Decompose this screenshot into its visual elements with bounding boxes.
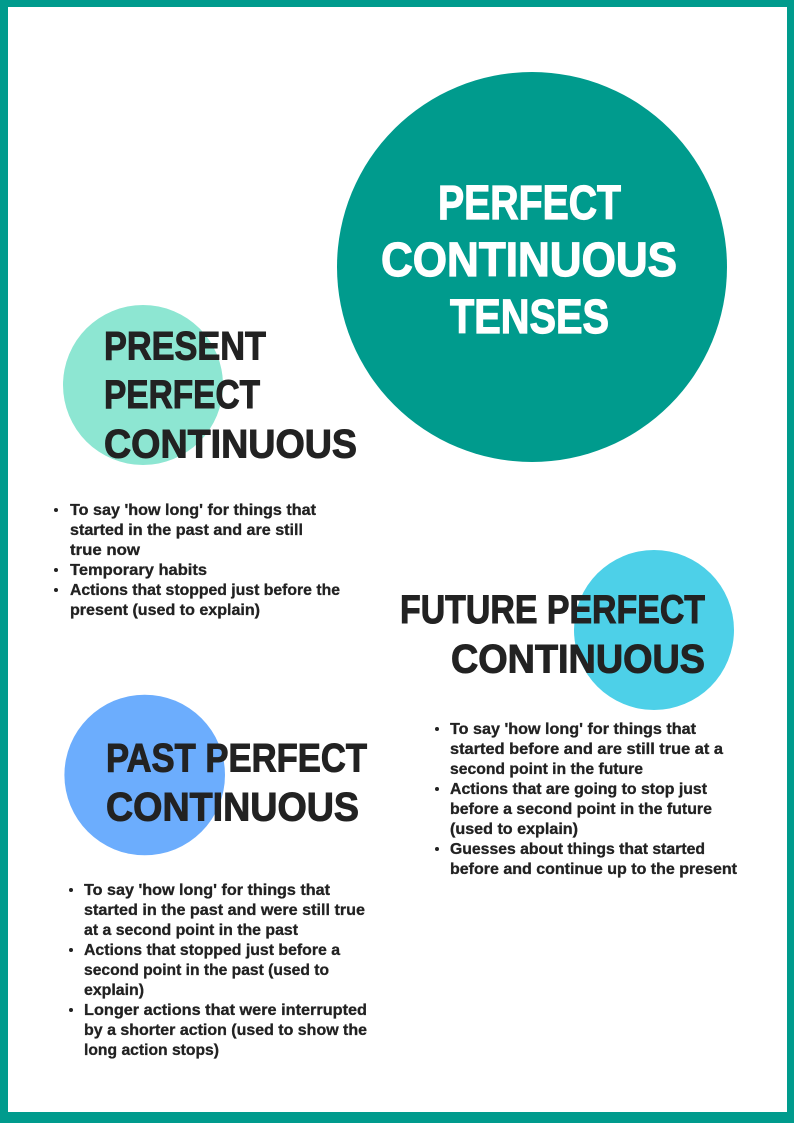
icon: mint circle [63, 305, 223, 465]
text block: present perfect uses: started in the past and are still [70, 522, 303, 539]
text block: present perfect uses: present (used to explain) [70, 602, 260, 619]
text block: present perfect uses: true now [70, 542, 141, 559]
panel: past perfect continuous [64, 695, 367, 1059]
text block: past perfect uses: at a second point in the past [84, 922, 298, 939]
heading: past perfect continuous: CONTINUOUS [106, 785, 359, 829]
text block: past perfect uses: Longer actions that were interrupted [84, 1002, 367, 1019]
text block: past perfect uses: long action stops) [84, 1042, 219, 1059]
heading: present perfect continuous: CONTINUOUS [104, 422, 357, 466]
heading: present perfect continuous: PERFECT [104, 373, 260, 417]
text block: future perfect uses: started before and are still true at a [450, 741, 723, 758]
icon: blue circle [64, 695, 225, 855]
heading: present perfect continuous: PRESENT [104, 324, 266, 368]
text block: past perfect uses: explain) [84, 982, 144, 999]
text block: future perfect uses: second point in the future [450, 761, 643, 778]
title circle [337, 72, 727, 462]
text block: future perfect uses: To say 'how long' for things that [450, 721, 696, 738]
heading: past perfect continuous: PAST PERFECT [106, 737, 367, 781]
heading: future perfect continuous: CONTINUOUS [451, 638, 705, 682]
text block: present perfect uses [54, 502, 340, 619]
text block: present perfect uses: Actions that stopped just before the [70, 582, 340, 599]
text block: past perfect uses: second point in the past (used to [84, 962, 329, 979]
text block: future perfect uses: before and continue up to the present [450, 861, 737, 878]
heading: future perfect continuous: FUTURE PERFECT [400, 588, 705, 632]
panel: future perfect continuous [400, 550, 737, 878]
title: TENSES [450, 291, 609, 344]
text block: future perfect uses: (used to explain) [450, 821, 578, 838]
text block: future perfect uses: Guesses about things that started [450, 841, 705, 858]
text block: present perfect uses: Temporary habits [70, 562, 207, 579]
title [381, 177, 677, 344]
text block: past perfect uses: Actions that stopped just before a [84, 942, 340, 959]
title: PERFECT [438, 177, 621, 230]
panel: present perfect continuous [54, 305, 357, 619]
text block: past perfect uses: by a shorter action (used to show the [84, 1022, 367, 1039]
text block: past perfect uses: To say 'how long' for things that [84, 882, 330, 899]
text block: past perfect uses: started in the past and were still true [84, 902, 365, 919]
text block: future perfect uses: before a second point in the future [450, 801, 712, 818]
title: CONTINUOUS [381, 234, 677, 287]
icon: cyan circle [574, 550, 734, 710]
heading: past perfect continuous [106, 737, 367, 829]
heading: future perfect continuous [400, 588, 705, 682]
text block: past perfect uses [69, 882, 367, 1059]
text block: present perfect uses: To say 'how long' for things that [70, 502, 316, 519]
heading: present perfect continuous [104, 324, 357, 466]
text block: future perfect uses [435, 721, 737, 878]
text block: future perfect uses: Actions that are going to stop just [450, 781, 707, 798]
